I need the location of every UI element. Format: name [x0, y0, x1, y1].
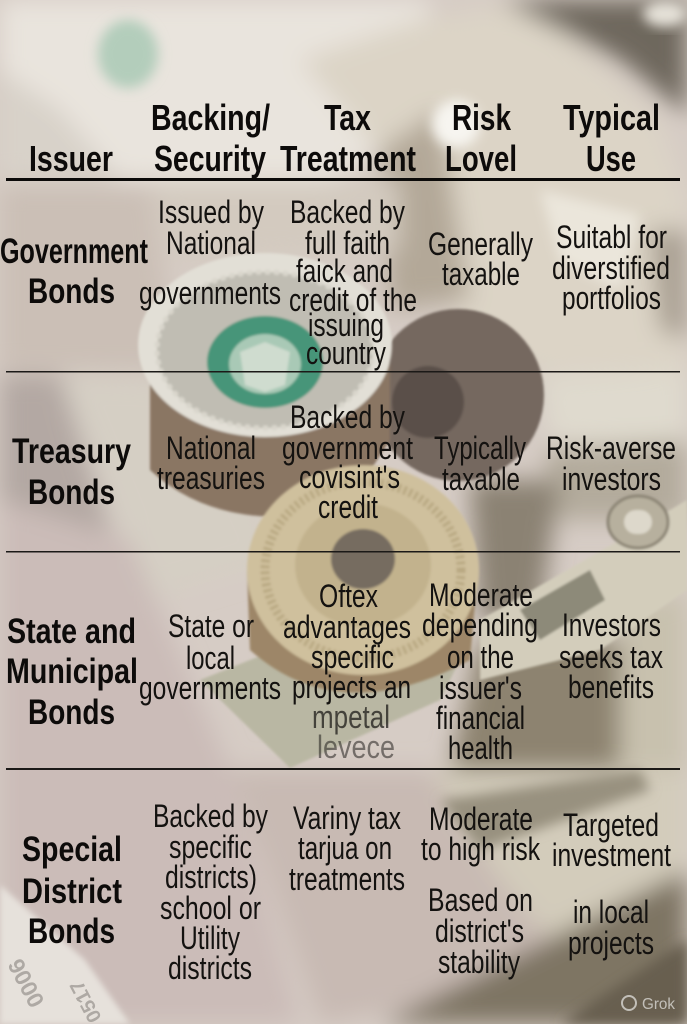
- heading: Typical Use: [563, 97, 660, 179]
- issuer: State and Municipal Bonds: Municipal: [6, 652, 138, 691]
- heading: Backing/Security: Security: [154, 138, 266, 179]
- tax treatment text: specific: [311, 639, 394, 675]
- heading: Tax Treatment: [280, 97, 416, 179]
- typical use text: Targeted: [563, 807, 659, 843]
- tax treatment text: full faith: [305, 225, 390, 261]
- backing text: [139, 608, 281, 706]
- dollar bill under the coins: [200, 496, 687, 768]
- row: Special District Bonds: [22, 798, 671, 986]
- backing text: districts: [168, 950, 252, 986]
- tax treatment text: [282, 399, 413, 525]
- risk text: taxable: [442, 256, 520, 292]
- tax treatment text: projects an: [292, 669, 411, 705]
- heading: Tax Treatment: Tax: [324, 97, 371, 138]
- backing text: treasuries: [157, 460, 265, 496]
- issuer: Treasury Bonds: Bonds: [28, 473, 115, 512]
- coin stack: silver coin with green seal: [138, 253, 392, 517]
- risk text: depending: [422, 607, 538, 643]
- risk text: Moderate: [429, 577, 533, 613]
- typical use text: [552, 219, 670, 316]
- risk text: financial: [436, 700, 525, 736]
- backing text: Backed by: [153, 798, 268, 834]
- risk text: Typically: [434, 430, 526, 466]
- watermark: Grok: [622, 996, 676, 1013]
- backing text: school or: [160, 890, 261, 926]
- backing text: National: [166, 430, 256, 466]
- issuer: Treasury Bonds: Treasury: [12, 432, 131, 471]
- row: Treasury Bonds: [12, 399, 676, 525]
- backing text: districts): [165, 859, 257, 895]
- background: serial digits on the banknote: 0006: [2, 954, 49, 1012]
- risk text: on the: [447, 639, 514, 675]
- background: serial digits on the banknote: [2, 954, 106, 1024]
- tax treatment text: government: [282, 430, 413, 466]
- tax treatment text: credit: [318, 489, 378, 525]
- backing text: governments: [139, 275, 281, 311]
- tax treatment text: treatments: [289, 861, 405, 897]
- typical use text: investors: [562, 461, 661, 497]
- tax treatment text: levece: [317, 729, 395, 765]
- risk text: issuer's: [439, 670, 522, 706]
- risk text: Based on: [428, 882, 533, 918]
- tax treatment text: Backed by: [290, 399, 405, 435]
- backing text: [153, 798, 268, 986]
- backing text: [139, 194, 281, 311]
- typical use text: projects: [568, 925, 654, 961]
- issuer: Treasury Bonds: [12, 432, 131, 512]
- risk text: taxable: [442, 461, 520, 497]
- risk text: stability: [438, 944, 520, 980]
- backing text: specific: [169, 829, 252, 865]
- row: State and Municipal Bonds: [6, 577, 663, 766]
- backing text: local: [186, 640, 235, 676]
- heading: Issuer: Issuer: [29, 138, 113, 179]
- tax treatment text: issuing: [308, 307, 384, 343]
- table rules: [6, 178, 680, 770]
- issuer: Government Bonds: [0, 232, 148, 311]
- tax treatment text: mpetal: [312, 699, 390, 735]
- heading: Risk Level: [445, 97, 517, 179]
- backing text: National: [166, 225, 256, 261]
- coin stack: dark coin: [372, 309, 544, 481]
- heading: Backing/Security: [151, 97, 270, 179]
- risk text: Moderate: [429, 801, 533, 837]
- typical use text: [552, 807, 671, 961]
- backing text: governments: [139, 670, 281, 706]
- issuer: State and Municipal Bonds: [6, 612, 138, 732]
- tax treatment text: Backed by: [290, 194, 405, 230]
- typical use text: [546, 430, 676, 497]
- risk text: health: [448, 730, 513, 766]
- tax treatment text: covisint's: [299, 459, 400, 495]
- tax treatment text: [289, 194, 417, 371]
- typical use text: in local: [573, 894, 649, 930]
- backing text: Utility: [180, 920, 240, 956]
- tax treatment text: Variny tax: [293, 800, 401, 836]
- issuer: Special District Bonds: Bonds: [28, 912, 115, 951]
- risk text: [421, 801, 541, 980]
- heading: Typical Use: Use: [586, 138, 636, 179]
- issuer: Government Bonds: Bonds: [28, 272, 115, 311]
- tax treatment text: tarjua on: [298, 830, 392, 866]
- tax treatment text: Oftex: [319, 578, 378, 614]
- tax treatment text: [283, 578, 411, 765]
- risk text: [428, 226, 533, 292]
- issuer: Special District Bonds: [22, 830, 122, 951]
- header row: [29, 97, 660, 179]
- backing text: Issued by: [158, 194, 264, 230]
- tax treatment text: country: [306, 335, 386, 371]
- issuer: State and Municipal Bonds: State and: [7, 612, 136, 651]
- tax treatment text: faick and: [296, 253, 393, 289]
- tax treatment text: [289, 800, 405, 897]
- issuer: State and Municipal Bonds: Bonds: [28, 693, 115, 732]
- issuer: Special District Bonds: Special: [22, 830, 122, 869]
- coin stack: gold coin with centre hole: [247, 465, 479, 693]
- heading: Risk Level: Risk: [452, 97, 512, 138]
- risk text: Generally: [428, 226, 533, 262]
- watermark: Grok: Grok: [642, 996, 676, 1013]
- risk text: [434, 430, 526, 497]
- tax treatment text: credit of the: [289, 282, 417, 318]
- issuer: Special District Bonds: District: [22, 872, 122, 911]
- heading: Backing/Security: Backing/: [151, 97, 270, 138]
- risk text: to high risk: [421, 831, 541, 867]
- row: Government Bonds: [0, 194, 670, 371]
- tax treatment text: advantages: [283, 609, 411, 645]
- heading: Tax Treatment: Treatment: [280, 138, 416, 179]
- typical use text: [559, 607, 663, 705]
- risk text: [422, 577, 538, 766]
- risk text: district's: [435, 913, 524, 949]
- backing text: State or: [168, 608, 254, 644]
- heading: Risk Level: Lovel: [445, 138, 517, 179]
- typical use text: benefits: [568, 669, 654, 705]
- backing text: [157, 430, 265, 496]
- heading: Typical Use: Typical: [563, 97, 660, 138]
- issuer: Government Bonds: Government: [0, 232, 148, 271]
